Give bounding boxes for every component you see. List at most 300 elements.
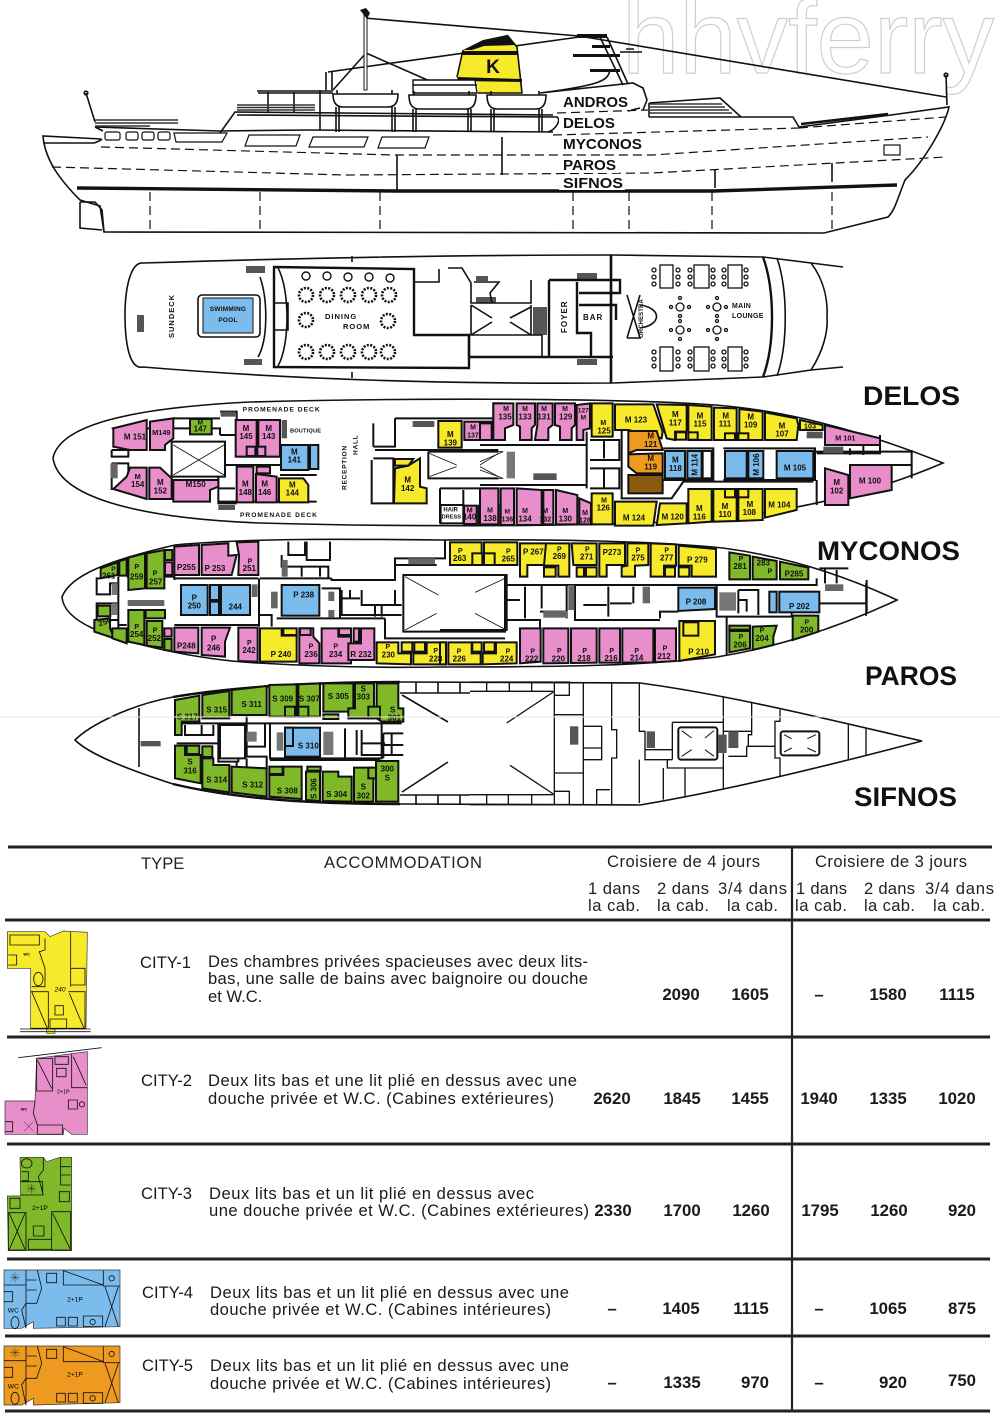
Paros bow half rooms: P 208	[686, 597, 707, 606]
Paros stern half rooms: P	[211, 635, 217, 644]
Myconos stern half rooms: 139	[444, 439, 458, 448]
Myconos bow half rooms: 107	[775, 429, 789, 438]
dining room: DINING	[325, 312, 357, 321]
Paros bow half rooms: 228	[429, 655, 443, 664]
row: City-4: 875	[948, 1299, 976, 1318]
row: City-3: CITY-3	[141, 1184, 192, 1203]
Paros bow half rooms: 283	[757, 559, 771, 568]
Paros bow half rooms: P 279	[687, 555, 708, 564]
Paros stern half rooms: P	[153, 627, 158, 634]
Sifnos cabins: S 307	[299, 695, 320, 704]
Myconos bow half rooms: 108	[743, 508, 757, 517]
Sifnos cabins	[141, 683, 403, 802]
Paros stern half rooms: 257	[149, 577, 163, 586]
Myconos bow half rooms: 135	[498, 413, 512, 422]
Paros stern half rooms: P	[134, 624, 139, 631]
Myconos bow half rooms: M	[697, 411, 704, 420]
row: City-2: CITY-2	[141, 1071, 192, 1090]
icon: City-1 cabin plan	[7, 931, 91, 1033]
Paros stern half rooms: 230	[382, 651, 396, 660]
deck house	[413, 80, 477, 93]
Myconos bow half rooms: 109	[744, 421, 758, 430]
Paros bow half rooms: 204	[755, 634, 769, 643]
bridge tower and bars	[540, 37, 649, 117]
Delos stairs	[137, 266, 597, 365]
Myconos stern half rooms: 147	[194, 425, 208, 434]
Myconos stern half rooms: M150	[186, 480, 206, 489]
Myconos bow half rooms: 115	[694, 419, 707, 428]
Myconos stern half rooms: M	[467, 505, 473, 514]
Delos hull	[125, 255, 827, 383]
Paros bow half rooms: P	[530, 649, 535, 656]
deck names on profile: SIFNOS	[563, 175, 623, 192]
Paros bow half rooms: P	[739, 556, 744, 563]
Myconos bow half rooms	[480, 403, 912, 526]
Paros stern half rooms: P255	[177, 563, 196, 572]
Paros bow half rooms: 224	[500, 655, 514, 664]
Myconos bow half rooms: M 101	[835, 433, 856, 442]
Paros bow half rooms: P285	[785, 569, 804, 578]
row: City-2: 1940	[800, 1089, 838, 1108]
Sifnos cabins: S	[390, 705, 396, 714]
dining room: ROOM	[343, 322, 370, 331]
icon: City-4 cabin plan: 2+1P	[67, 1297, 83, 1304]
swimming pool: POOL	[218, 317, 238, 324]
Sifnos cabins: 316	[183, 767, 197, 776]
Myconos bow half rooms: 117	[669, 419, 682, 428]
Sifnos cabins: S 312	[242, 781, 264, 790]
row: City-3: 1795	[801, 1201, 839, 1220]
table header: 2 dans	[864, 879, 915, 898]
Myconos stern half rooms: 144	[286, 489, 300, 498]
table rules	[5, 847, 992, 1411]
Paros bow half rooms: P	[506, 549, 511, 556]
Sifnos hull	[75, 682, 922, 805]
Paros bow half rooms: P 202	[789, 602, 810, 611]
Paros bow half rooms: P 210	[688, 647, 710, 656]
Sifnos cabins: S	[361, 685, 367, 694]
Paros stern half rooms: 259	[130, 573, 144, 582]
fold line	[0, 716, 1000, 718]
table header: 3/4 dans	[925, 879, 994, 898]
row: City-2: 1845	[663, 1089, 701, 1108]
deck names on profile: DELOS	[563, 115, 615, 132]
Paros stern half rooms: 250	[188, 601, 202, 610]
deck names on profile: MYCONOS	[563, 136, 642, 153]
icon: City-2 cabin plan	[5, 1048, 102, 1134]
lifeboats	[333, 90, 546, 132]
sundeck label: SUNDECK	[167, 294, 176, 338]
row: City-1: bas, une salle de bains avec baignoire ou douche	[208, 969, 588, 988]
Paros stern half rooms	[94, 540, 505, 664]
Sifnos cabins: 301	[388, 713, 402, 722]
row: City-1: 1580	[869, 985, 907, 1004]
foyer label: FOYER	[560, 300, 569, 333]
table header: 1 dans	[796, 879, 847, 898]
Myconos bow half rooms: M	[747, 413, 754, 422]
Myconos bow half rooms: 134	[518, 515, 532, 524]
Myconos bow half rooms: 102	[830, 487, 844, 496]
Myconos bow half rooms: M 120	[662, 513, 684, 522]
Myconos bow half rooms: M	[562, 406, 568, 413]
ship side profile	[43, 8, 949, 233]
table header: Croisiere de 4 jours	[607, 852, 760, 871]
Paros stern half rooms: 246	[207, 643, 221, 652]
row: City-3: 920	[948, 1201, 976, 1220]
row: City-1: CITY-1	[140, 953, 191, 972]
deck name: Paros: PAROS	[865, 661, 957, 691]
Paros stern half rooms: 236	[304, 650, 318, 659]
Myconos stern half rooms: 146	[258, 488, 272, 497]
Sifnos cabins: S	[385, 773, 391, 782]
Myconos bow half rooms: 131	[537, 413, 551, 422]
row: City-4: –	[607, 1299, 617, 1318]
row: City-3: 1700	[663, 1201, 701, 1220]
Myconos bow half rooms: M 105	[784, 463, 807, 472]
orchestra	[627, 295, 656, 338]
Paros bow half rooms: 281	[733, 562, 747, 571]
Myconos bow half rooms: M 106	[752, 453, 761, 476]
Paros stern half rooms: 234	[329, 650, 343, 659]
table header: la cab.	[864, 896, 915, 915]
Paros stern half rooms: P	[333, 643, 338, 650]
Myconos bow half rooms: M	[600, 420, 606, 427]
Myconos bow half rooms: M	[542, 508, 548, 515]
Myconos stern half rooms: BOUTIQUE	[290, 429, 321, 435]
Myconos bow half rooms: 121	[644, 440, 658, 449]
bar label: BAR	[583, 313, 603, 322]
row: City-2: 1020	[938, 1089, 976, 1108]
price table	[4, 847, 994, 1411]
Paros bow half rooms: P	[768, 569, 773, 576]
icon: City-3 cabin plan: 2+1P	[32, 1205, 48, 1212]
deck plan: Delos	[125, 255, 843, 383]
Paros bow half rooms: 277	[660, 553, 674, 562]
Paros bow half rooms: P	[609, 648, 614, 655]
table header: ACCOMMODATION	[324, 853, 482, 872]
Paros bow half rooms: P	[582, 648, 587, 655]
deck plan: Myconos	[53, 399, 943, 526]
table header: la cab.	[933, 896, 985, 915]
Myconos bow half rooms: M	[562, 508, 568, 515]
Sifnos cabins: S 305	[328, 692, 349, 701]
row: City-5: 1335	[663, 1373, 701, 1392]
Myconos bow half rooms: M	[647, 454, 654, 463]
Paros bow half rooms: P	[663, 645, 668, 652]
Paros stern half rooms: 261	[102, 571, 116, 580]
row: City-4: douche privée et W.C. (Cabines intérieures)	[210, 1300, 551, 1319]
hull outline	[43, 107, 949, 233]
Sifnos cabins: 300	[381, 765, 395, 774]
Myconos bow half rooms: M	[582, 510, 588, 517]
Myconos bow half rooms: M	[672, 455, 679, 464]
Paros stern half rooms: P	[247, 640, 252, 647]
Paros bow half rooms: P	[636, 547, 641, 554]
central rooms	[414, 255, 620, 383]
Myconos bow half rooms: M	[722, 502, 729, 511]
Myconos bow half rooms: M	[722, 411, 729, 420]
Myconos stern half rooms: HAIR	[443, 507, 459, 513]
Myconos stern half rooms: 152	[154, 487, 168, 496]
Myconos bow half rooms: 111	[719, 419, 732, 428]
Sifnos cabins: S 310	[298, 741, 319, 750]
Myconos bow half rooms: 110	[719, 510, 732, 519]
Sifnos cabins: S 308	[277, 787, 298, 796]
Paros stern half rooms: P	[111, 566, 115, 573]
table header: TYPE	[141, 854, 184, 873]
row: City-4: CITY-4	[142, 1283, 193, 1302]
Myconos stern half rooms: M	[261, 479, 268, 488]
Paros stern half rooms: P	[385, 644, 390, 651]
Myconos bow half rooms: 129	[559, 413, 573, 422]
Paros stern half rooms: P 238	[293, 591, 315, 600]
deck name: Myconos: MYCONOS	[817, 536, 960, 566]
Myconos stern half rooms: M	[404, 475, 411, 484]
row: City-1: 1115	[939, 985, 975, 1004]
Myconos bow half rooms: M	[505, 509, 511, 516]
Myconos stern half rooms: M 151	[124, 433, 147, 442]
Myconos bow half rooms: M	[503, 406, 509, 413]
Paros stern half rooms: P	[192, 593, 198, 602]
row: City-3: une douche privée et W.C. (Cabines extérieures)	[209, 1201, 589, 1220]
row: City-5: Deux lits bas et un lit plié en dessus avec une	[210, 1356, 569, 1375]
rudder	[80, 202, 104, 232]
deck plan: Sifnos	[75, 682, 922, 805]
Paros bow half rooms: P	[760, 627, 765, 634]
Paros stern half rooms: 244	[229, 603, 243, 612]
Myconos stern half rooms: M	[470, 424, 476, 431]
Myconos stern half rooms: M	[242, 479, 249, 488]
row: City-2: douche privée et W.C. (Cabines extérieures)	[208, 1089, 554, 1108]
Paros bow half rooms: 226	[453, 655, 467, 664]
row: City-5: douche privée et W.C. (Cabines intérieures)	[210, 1374, 551, 1393]
Myconos stern half rooms: M	[135, 472, 141, 481]
Myconos bow half rooms: M	[601, 497, 607, 504]
Paros bow half rooms: P	[585, 547, 590, 554]
Paros bow half rooms: 216	[604, 654, 618, 663]
row: City-1: 2090	[662, 985, 700, 1004]
table header: 2 dans	[657, 879, 709, 898]
row: City-1: Des chambres privées spacieuses avec deux lits-	[208, 952, 588, 971]
Myconos stern half rooms: RECEPTION	[342, 445, 349, 490]
row: City-1: –	[814, 985, 824, 1004]
Paros bow half rooms: 220	[552, 655, 566, 664]
Paros bow half rooms: 271	[580, 553, 594, 562]
table header: la cab.	[795, 896, 847, 915]
Paros bow half rooms: 206	[733, 641, 747, 650]
table header: Croisiere de 3 jours	[815, 852, 967, 871]
Myconos stern half rooms: 138	[483, 514, 497, 523]
Paros stern half rooms: R 232	[350, 650, 372, 659]
row: City-4: 1115	[733, 1299, 769, 1318]
icon: City-4 cabin plan	[4, 1270, 120, 1329]
Paros stern half rooms: P	[309, 643, 314, 650]
Myconos bow half rooms: M	[779, 421, 786, 430]
orchestra: ORCHESTRA	[639, 299, 645, 338]
Paros bow half rooms: 218	[577, 654, 591, 663]
Myconos bow half rooms: M	[541, 406, 547, 413]
Myconos bow half rooms: M 100	[859, 477, 882, 486]
Myconos bow half rooms: 127	[578, 407, 589, 414]
row: City-4: 1405	[662, 1299, 700, 1318]
Myconos stern half rooms: 143	[262, 432, 276, 441]
table header: la cab.	[657, 896, 709, 915]
Myconos bow half rooms: 133	[518, 413, 532, 422]
Paros bow half rooms: P	[506, 649, 511, 656]
row: City-3	[7, 1157, 976, 1251]
row: City-3: Deux lits bas et un lit plié en dessus avec	[209, 1184, 534, 1203]
Paros bow half rooms: P273	[603, 548, 622, 557]
Myconos bow half rooms: 136	[502, 517, 513, 524]
icon: City-5 cabin plan: WC	[8, 1383, 19, 1390]
row: City-1: 1605	[731, 985, 769, 1004]
Paros stern half rooms: 242	[242, 646, 256, 655]
waterline belt	[77, 185, 897, 191]
Paros bow half rooms: P	[457, 649, 462, 656]
Myconos stern half rooms: PROMENADE DECK	[240, 512, 318, 519]
Myconos stern half rooms: M	[198, 419, 204, 426]
Myconos stern half rooms: 140	[463, 513, 477, 522]
row: City-1: et W.C.	[208, 987, 262, 1006]
deck name: Delos: DELOS	[863, 381, 960, 411]
funnel with K	[457, 35, 522, 93]
swimming pool	[198, 295, 260, 337]
main lounge label: MAIN	[732, 303, 751, 310]
Myconos bow half rooms: 125	[597, 427, 611, 436]
row: City-2: 1455	[731, 1089, 769, 1108]
Myconos stern half rooms: M	[265, 424, 272, 433]
Paros bow half rooms: P	[739, 634, 744, 641]
icon: City-1 cabin plan: WC	[23, 952, 30, 957]
Myconos bow half rooms: M 123	[625, 416, 648, 425]
Myconos stern half rooms: DRESS	[442, 514, 461, 520]
Paros bow half rooms: 263	[453, 554, 467, 563]
row: City-5: 970	[741, 1373, 769, 1392]
swimming pool: SWIMMING	[210, 306, 246, 313]
row: City-5: 750	[948, 1371, 976, 1390]
Myconos bow half rooms: M 104	[768, 501, 791, 510]
Paros bow half rooms: P	[804, 619, 809, 626]
Paros bow half rooms: 275	[631, 553, 645, 562]
Myconos bow half rooms: M	[647, 431, 654, 440]
Myconos bow half rooms: M	[581, 415, 587, 422]
Myconos stern half rooms: M	[157, 478, 164, 487]
Myconos stern half rooms: M	[486, 506, 493, 515]
Paros stern half rooms: 251	[243, 564, 257, 573]
Paros bow half rooms: 200	[800, 625, 814, 634]
Myconos bow half rooms: 128	[579, 517, 591, 524]
superstructure	[220, 72, 640, 133]
Sifnos cabins: S 314	[206, 775, 228, 784]
Myconos stern half rooms: 148	[239, 488, 253, 497]
Sifnos cabins: S	[361, 783, 367, 792]
Paros bow half rooms	[429, 542, 867, 664]
Paros stern half rooms: P	[134, 564, 139, 571]
row: City-4	[4, 1270, 976, 1329]
Myconos bow half rooms: M	[833, 478, 840, 487]
row: City-4: –	[814, 1299, 824, 1318]
Myconos bow half rooms: 103	[804, 421, 816, 430]
row: City-3: 1260	[732, 1201, 770, 1220]
Paros bow half rooms: P	[664, 547, 669, 554]
dining room	[274, 267, 469, 368]
deck names on profile: ANDROS	[563, 94, 628, 111]
Paros stern half rooms: 254	[130, 630, 144, 639]
Paros bow half rooms: P	[634, 648, 639, 655]
table header: la cab.	[588, 896, 640, 915]
Paros bow half rooms: P	[458, 548, 463, 555]
Myconos bow half rooms: M	[522, 406, 528, 413]
Paros bow half rooms: P	[433, 648, 438, 655]
Myconos stern half rooms: 137	[467, 432, 479, 439]
Myconos stern half rooms: 142	[401, 484, 415, 493]
row: City-2: 1335	[869, 1089, 907, 1108]
Paros hull	[62, 539, 897, 667]
table header: la cab.	[727, 896, 778, 915]
Paros stern half rooms: 252	[148, 634, 162, 643]
windows	[105, 132, 900, 155]
Myconos stern half rooms	[111, 403, 502, 524]
icon: City-1 cabin plan: 240	[53, 987, 66, 994]
Paros bow half rooms: 265	[502, 555, 516, 564]
Myconos stern half rooms: 154	[131, 480, 145, 489]
Myconos bow half rooms: M 124	[623, 513, 646, 522]
Sifnos cabins: S 317	[177, 713, 198, 722]
Myconos stern half rooms: PROMENADE DECK	[243, 407, 321, 414]
Myconos bow half rooms: M 114	[690, 453, 699, 476]
row: City-5: 920	[879, 1373, 907, 1392]
Sifnos forward rooms	[470, 682, 866, 805]
Myconos bow half rooms: M	[522, 508, 528, 515]
Paros bow half rooms: 212	[657, 652, 671, 661]
Paros bow half rooms: P	[557, 648, 562, 655]
Paros stern half rooms: P248	[177, 641, 196, 650]
Paros bow half rooms: 222	[525, 655, 539, 664]
Myconos stern half rooms: M	[243, 424, 250, 433]
main lounge label: LOUNGE	[732, 313, 764, 320]
row: City-2	[5, 1048, 976, 1134]
icon: City-2 cabin plan: WC	[21, 1106, 27, 1111]
deck names on profile: PAROS	[563, 157, 616, 174]
row: City-3: 1260	[870, 1201, 908, 1220]
deck divider dashes	[52, 110, 946, 175]
icon: City-2 cabin plan: 2+1P	[57, 1089, 70, 1095]
icon: City-3 cabin plan	[7, 1157, 72, 1251]
Myconos bow half rooms: 116	[693, 513, 706, 522]
Sifnos cabins: S 311	[241, 700, 262, 709]
table header	[141, 852, 994, 915]
Paros bow half rooms: 269	[553, 552, 567, 561]
Paros stern half rooms: P	[153, 571, 158, 578]
row: City-3: 2330	[594, 1201, 632, 1220]
Sifnos cabins: S 304	[326, 790, 348, 799]
row: City-2: 2620	[593, 1089, 631, 1108]
Sifnos cabins: S 309	[272, 695, 294, 704]
Myconos bow half rooms: 138	[483, 514, 497, 523]
table header: 3/4 dans	[718, 879, 787, 898]
Sifnos atrium hatch	[402, 695, 448, 792]
Myconos bow half rooms: M	[487, 507, 493, 514]
Sifnos cabins: S 306	[309, 778, 318, 799]
Myconos stern half rooms: HALL	[352, 435, 359, 455]
Myconos bow half rooms: M	[696, 504, 703, 513]
Paros stern half rooms: 256	[97, 615, 113, 628]
lounge furniture	[652, 265, 748, 371]
Myconos bow half rooms: 130	[559, 515, 573, 524]
Myconos bow half rooms: M	[672, 410, 679, 419]
main lounge label	[732, 303, 764, 320]
Sifnos cabins: S 315	[206, 706, 228, 715]
